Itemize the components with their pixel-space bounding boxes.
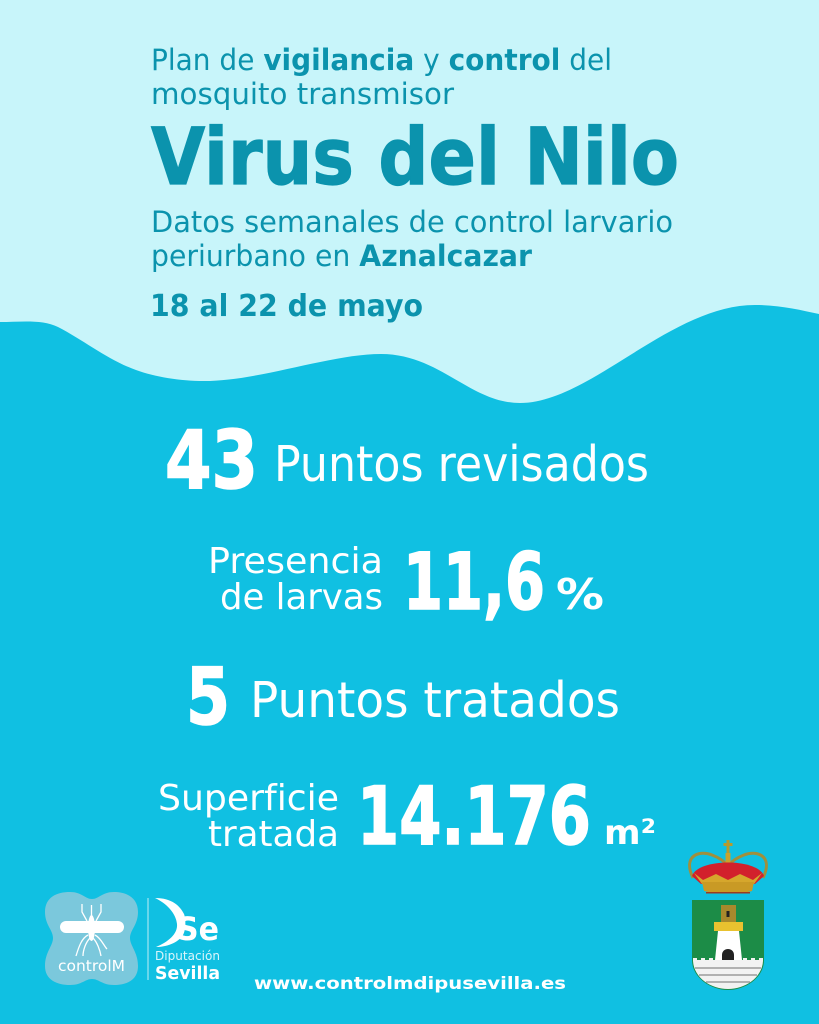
stat: puntos tratados: [186, 653, 620, 743]
stat: puntos revisados: 43: [165, 414, 258, 507]
stat: puntos revisados: Puntos revisados: [274, 436, 649, 493]
shield: [692, 900, 764, 990]
divider: [148, 898, 149, 980]
stat: presencia de larvas: Presencia: [208, 541, 383, 582]
icon: mosquito: [60, 904, 124, 956]
wave main panel: [0, 305, 819, 1024]
stat: superficie tratada: m²: [604, 813, 656, 853]
logo: controlM: [45, 892, 138, 985]
light header background: [0, 0, 819, 420]
stat: presencia de larvas: 11,6: [403, 538, 545, 628]
stat: superficie tratada: 14.176: [357, 770, 591, 863]
date: 18 al 22 de mayo: [150, 289, 423, 324]
logo text: controlM: [58, 957, 125, 975]
header text: [150, 43, 679, 324]
logo: Diputacion de Sevilla: Sevilla: [155, 963, 220, 984]
stat: superficie tratada: [158, 770, 656, 863]
subtitle line 2: mosquito transmisor: [151, 77, 454, 111]
stat: superficie tratada: Superficie: [158, 778, 339, 819]
website: www.controlmdipusevilla.es: [254, 974, 566, 994]
main title: Virus del Nilo: [151, 113, 679, 203]
logo: Diputacion de Sevilla: Se: [177, 910, 219, 948]
coat of arms: [690, 840, 766, 990]
wall: [693, 958, 763, 989]
stat: presencia de larvas: %: [556, 570, 604, 619]
crown: [690, 840, 766, 894]
logo: Diputacion de Sevilla: [155, 898, 220, 984]
logo: Diputacion de Sevilla: Diputación: [155, 949, 220, 963]
stat: puntos tratados: 5: [186, 653, 230, 743]
data line 1: Datos semanales de control larvario: [151, 205, 673, 239]
stat: puntos revisados: [165, 414, 649, 507]
stat: presencia de larvas: de larvas: [220, 577, 383, 618]
subtitle line 1: Plan de vigilancia y control del: [151, 43, 612, 77]
tower: [721, 905, 736, 923]
stat: puntos tratados: Puntos tratados: [250, 672, 620, 729]
stat: superficie tratada: tratada: [208, 814, 339, 855]
data line 2: periurbano en Aznalcazar: [151, 239, 533, 273]
stat: presencia de larvas: [208, 538, 604, 628]
